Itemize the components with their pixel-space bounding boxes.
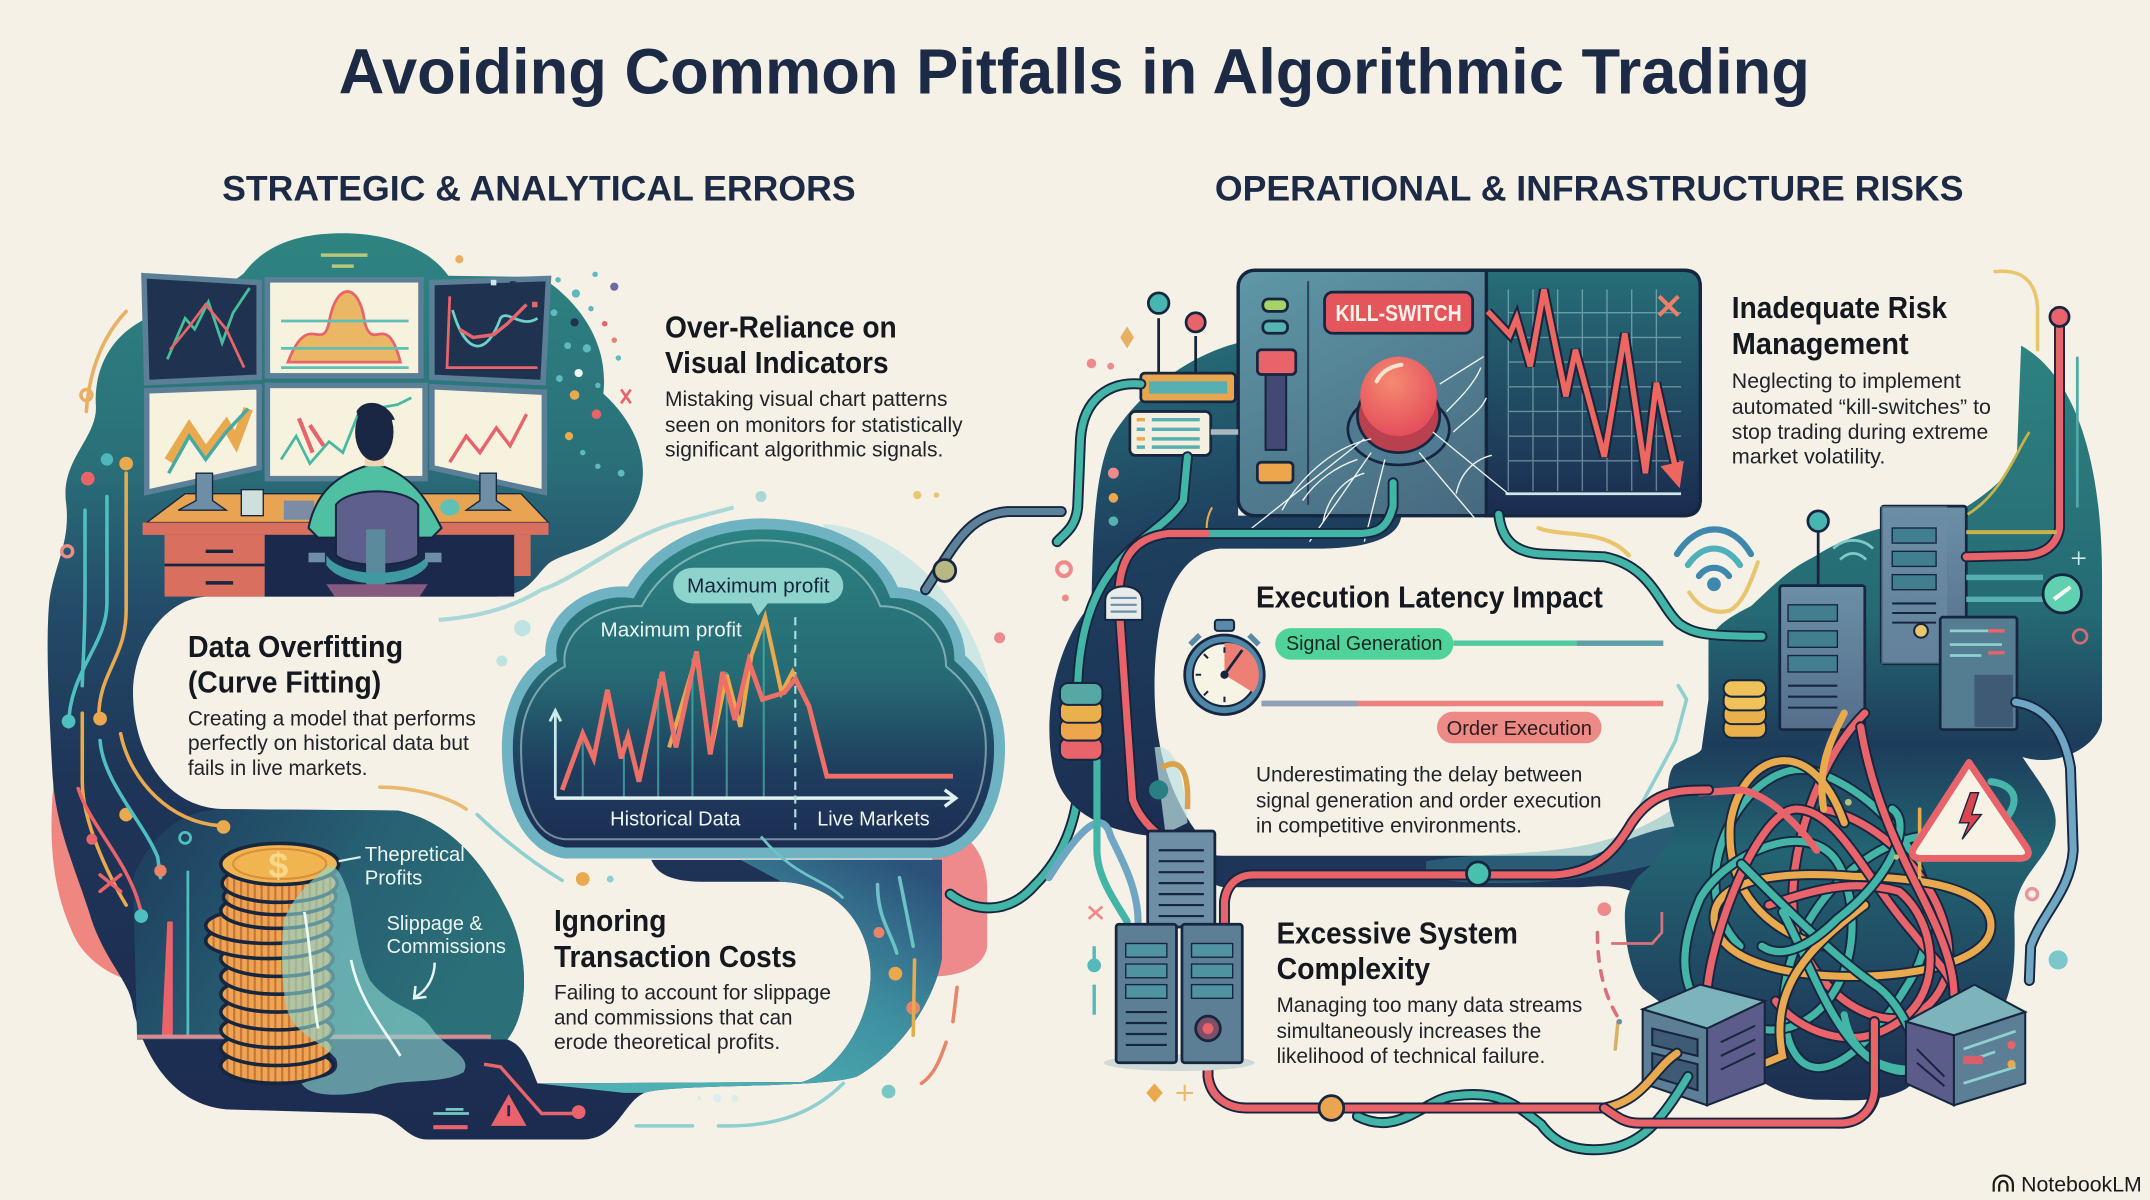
text: data overfitting: (Curve Fitting) bbox=[188, 667, 381, 700]
cobweb bbox=[1252, 357, 1508, 542]
heading: operational and infrastructure risks: OPERATIONAL & INFRASTRUCTURE RISKS bbox=[1215, 168, 1964, 208]
text: inadequate risk management: Neglecting to implement bbox=[1732, 369, 1961, 393]
text: over-reliance on visual indicators: significant algorithmic signals. bbox=[665, 438, 943, 462]
callout: maximum profit pill bbox=[673, 568, 843, 616]
icon: right database stack bbox=[1724, 680, 1766, 738]
label: maximum profit: Maximum profit bbox=[601, 619, 742, 641]
icon: connector plug bbox=[1105, 586, 1142, 620]
big red button bbox=[1348, 357, 1449, 465]
dollar sign on top coin: $ bbox=[268, 846, 288, 886]
icon: dissolving pixels bbox=[491, 272, 631, 477]
icon: server rack lower left bbox=[1104, 831, 1255, 1071]
text: ignoring transaction costs: Transaction Costs bbox=[554, 941, 797, 974]
text: ignoring transaction costs: and commissions that can bbox=[554, 1005, 793, 1029]
kill-switch label: KILL-SWITCH bbox=[1336, 300, 1462, 326]
labels: theoretical profits and slippage bbox=[339, 844, 506, 998]
text: over-reliance on visual indicators: seen on monitors for statistically bbox=[665, 413, 963, 437]
timeline: order execution: Order Execution bbox=[1447, 718, 1592, 740]
cable tangle bbox=[1685, 713, 2014, 1123]
text: inadequate risk management: market volatility. bbox=[1732, 445, 1885, 469]
logo: NotebookLM: NotebookLM bbox=[2021, 1173, 2142, 1197]
axis label: live markets: Live Markets bbox=[817, 809, 930, 831]
icon: server cluster upper right bbox=[1780, 506, 2017, 730]
cloud chart: overfitting bbox=[507, 524, 1000, 853]
icon: tangle server right bbox=[1906, 985, 2025, 1105]
text: excessive system complexity: Managing too many data streams bbox=[1277, 993, 1582, 1017]
text: over-reliance on visual indicators bbox=[665, 311, 963, 462]
icon: wifi bbox=[1538, 528, 1758, 612]
accent strokes near cloud bbox=[380, 491, 1005, 886]
labels: theoretical profits and slippage: Slippage & bbox=[387, 913, 483, 935]
icon: tangle server left bbox=[1643, 985, 1765, 1105]
left tower bbox=[1116, 924, 1176, 1063]
tower a bbox=[1780, 586, 1865, 730]
tower c bbox=[1940, 617, 2017, 730]
panel: operational risks backdrop bbox=[1049, 343, 2102, 1100]
text: execution latency impact: Underestimating the delay between bbox=[1256, 763, 1582, 787]
icon: stopwatch bbox=[1185, 620, 1264, 714]
text: excessive system complexity bbox=[1277, 917, 1582, 1068]
accent marks around monitors bbox=[62, 255, 463, 557]
text: over-reliance on visual indicators: Mistaking visual chart patterns bbox=[665, 387, 947, 411]
kill-switch label bbox=[1325, 292, 1473, 333]
trader seen from behind bbox=[309, 403, 442, 597]
panel controls bbox=[1257, 281, 1308, 505]
liquid spill bbox=[282, 866, 465, 1095]
text: execution latency impact bbox=[1256, 582, 1603, 837]
connector: cables across the middle bbox=[926, 512, 1079, 908]
text: data overfitting bbox=[188, 631, 476, 780]
icon: junction box and antennae bbox=[1087, 293, 1238, 455]
text: excessive system complexity: likelihood of technical failure. bbox=[1277, 1044, 1545, 1068]
text: excessive system complexity: Complexity bbox=[1277, 953, 1430, 986]
tower b bbox=[1881, 506, 1966, 664]
text: ignoring transaction costs: Ignoring bbox=[554, 905, 666, 938]
cables: main band and bottom loop bbox=[1208, 790, 1874, 1150]
labels: theoretical profits and slippage: Thepretical bbox=[365, 844, 465, 866]
labels: theoretical profits and slippage: Profits bbox=[365, 868, 422, 890]
coins bbox=[206, 843, 339, 1083]
cables: upper right bbox=[1966, 271, 2087, 981]
timeline: signal generation: Signal Generation bbox=[1286, 633, 1442, 655]
right tower bbox=[1182, 924, 1242, 1063]
text: excessive system complexity: Excessive System bbox=[1277, 917, 1518, 950]
text: over-reliance on visual indicators: Over-Reliance on bbox=[665, 311, 897, 344]
text: execution latency impact: in competitive environments. bbox=[1256, 813, 1522, 837]
line chart: fit on historical data then breakdown bbox=[550, 617, 956, 830]
text: execution latency impact: signal generation and order execution bbox=[1256, 789, 1602, 813]
monitors bbox=[144, 276, 548, 492]
axis label: historical data: Historical Data bbox=[610, 809, 741, 831]
text: data overfitting: Creating a model that performs bbox=[188, 706, 476, 730]
cables: middle column bbox=[1049, 384, 1762, 922]
text: ignoring transaction costs bbox=[554, 905, 831, 1054]
text: inadequate risk management: automated “kill-switches” to bbox=[1732, 395, 1991, 419]
icon: high-voltage warning triangle bbox=[1912, 762, 2028, 858]
timeline: order execution bbox=[1261, 704, 1663, 743]
icon: kill-switch control panel bbox=[1238, 270, 1700, 542]
icon: trading desk with monitors bbox=[143, 272, 631, 597]
timeline: signal generation bbox=[1275, 628, 1663, 660]
text: data overfitting: fails in live markets. bbox=[188, 756, 367, 780]
panel: strategic errors backdrop bbox=[48, 233, 992, 1140]
ribbon accents lower left bbox=[636, 837, 957, 1126]
text: inadequate risk management: Inadequate Risk bbox=[1732, 292, 1947, 325]
heading: strategic and analytical errors: STRATEGIC & ANALYTICAL ERRORS bbox=[222, 168, 856, 208]
callout: maximum profit pill: Maximum profit bbox=[687, 575, 830, 597]
text: execution latency impact: Execution Latency Impact bbox=[1256, 582, 1603, 615]
text: inadequate risk management bbox=[1732, 292, 1991, 469]
text: inadequate risk management: stop trading during extreme bbox=[1732, 420, 1988, 444]
text: ignoring transaction costs: Failing to account for slippage bbox=[554, 981, 831, 1005]
icon: left database stack bbox=[1060, 683, 1102, 760]
text: inadequate risk management: Management bbox=[1732, 328, 1909, 361]
text: excessive system complexity: simultaneously increases the bbox=[1277, 1019, 1541, 1043]
decoration: small marks right column bbox=[1057, 562, 1687, 1103]
text: data overfitting: perfectly on historical data but bbox=[188, 731, 469, 755]
text: data overfitting: Data Overfitting bbox=[188, 631, 403, 664]
title: Avoiding Common Pitfalls in Algorithmic Trading bbox=[339, 35, 1810, 107]
upper rack bbox=[1148, 831, 1215, 927]
desk bbox=[143, 473, 548, 597]
icon: coin stack dissolving bbox=[206, 843, 465, 1095]
chart side bbox=[1486, 270, 1700, 516]
left column circuit traces bbox=[62, 453, 491, 1037]
labels: theoretical profits and slippage: Commissions bbox=[387, 936, 506, 958]
icon: warning triangle with trace bbox=[433, 1064, 585, 1127]
text: over-reliance on visual indicators: Visual Indicators bbox=[665, 347, 889, 380]
text: ignoring transaction costs: erode theoretical profits. bbox=[554, 1030, 780, 1054]
